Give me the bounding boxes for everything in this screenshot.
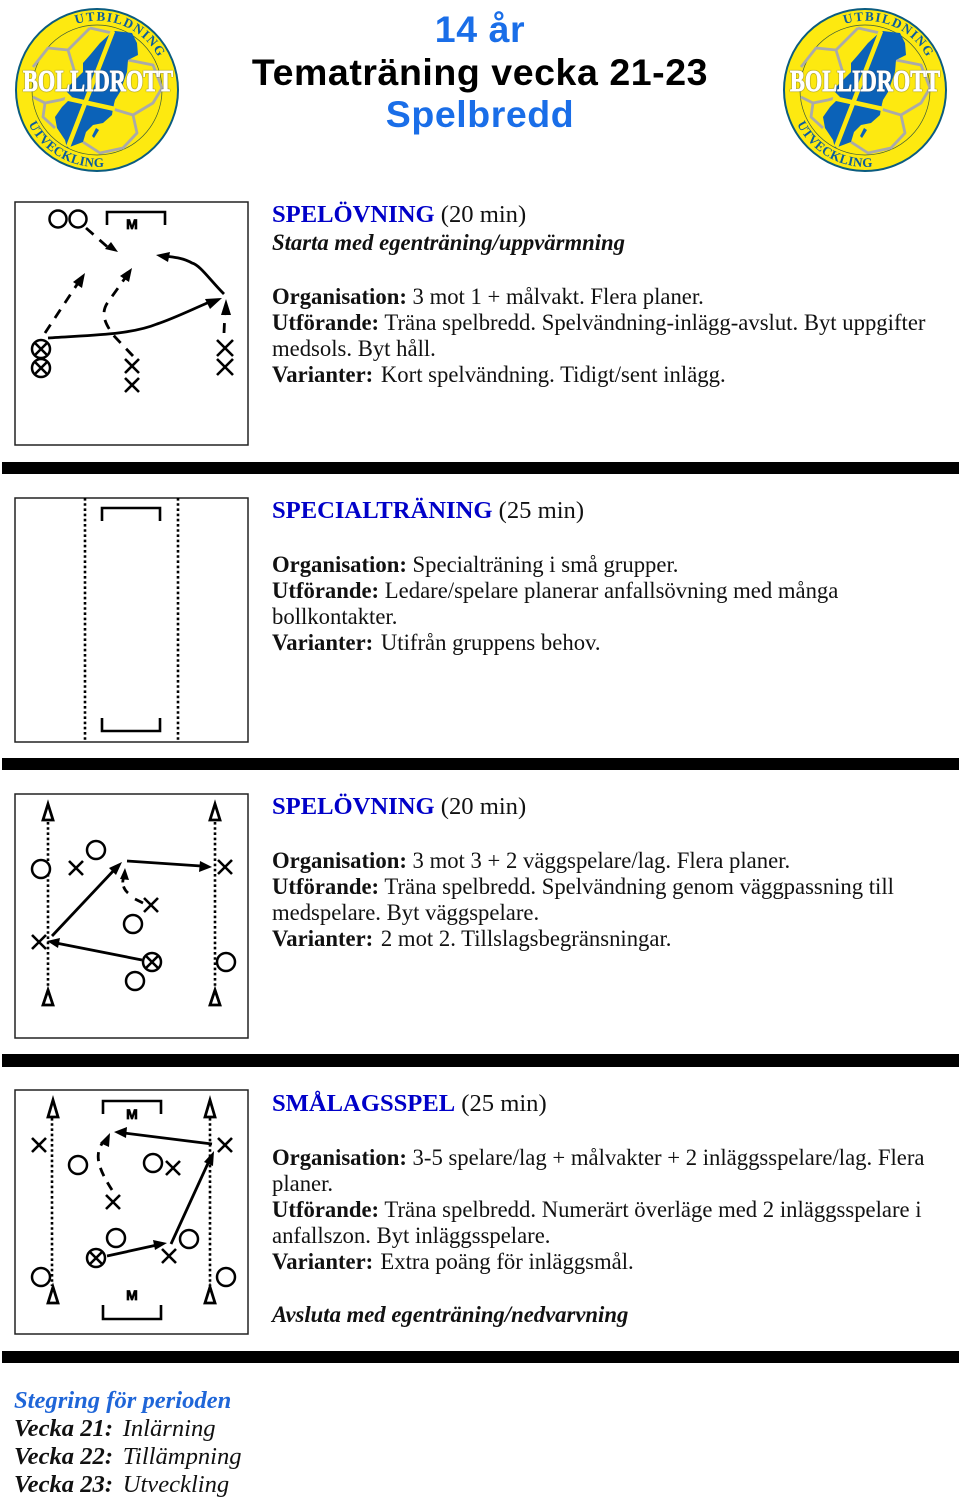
panel: diagram 4 smålagsspel: M bbox=[126, 1106, 138, 1122]
panel: diagram 4 smålagsspel bbox=[15, 1090, 248, 1334]
text block: smålagsspel: anfallszon. Byt inläggsspelare. bbox=[272, 1223, 550, 1248]
title bbox=[252, 8, 708, 135]
text block: spelövning 1: SPELÖVNING (20 min) bbox=[272, 201, 526, 228]
text block: spelövning 1: Starta med egenträning/uppvärmning bbox=[272, 230, 625, 255]
text block: stegring för perioden: Vecka 21: Inlärning bbox=[14, 1415, 216, 1442]
logo: left Bollidrott badge: UTBILDNING bbox=[74, 12, 164, 56]
text block: spelövning 1: Varianter: Kort spelvändning. Tidigt/sent inlägg. bbox=[272, 362, 726, 387]
panel: diagram 2 specialträning bbox=[15, 498, 248, 742]
text block: smålagsspel: planer. bbox=[272, 1171, 333, 1196]
panel: diagram 1 spelövning: M bbox=[126, 216, 138, 232]
text block: specialträning: Utförande: Ledare/spelare planerar anfallsövning med många bbox=[272, 578, 838, 603]
text block: spelövning 2: SPELÖVNING (20 min) bbox=[272, 793, 526, 820]
title: 14 år bbox=[435, 8, 525, 50]
text block: smålagsspel bbox=[270, 1089, 924, 1327]
text block: spelövning 1 bbox=[272, 201, 926, 387]
text block: spelövning 2: medspelare. Byt väggspelare. bbox=[272, 900, 539, 925]
text block: specialträning: bollkontakter. bbox=[272, 604, 397, 629]
text block: stegring för perioden: Stegring för perioden bbox=[14, 1387, 231, 1414]
logo: right Bollidrott badge bbox=[783, 8, 947, 172]
text block: specialträning bbox=[272, 497, 838, 655]
text block: stegring för perioden: Vecka 22: Tillämpning bbox=[14, 1443, 242, 1470]
text block: stegring för perioden: Vecka 23: Utveckling bbox=[14, 1471, 229, 1498]
logo: left Bollidrott badge: UTVECKLING bbox=[30, 120, 104, 167]
text block: spelövning 1: Organisation: 3 mot 1 + målvakt. Flera planer. bbox=[272, 284, 704, 309]
text block: smålagsspel: Utförande: Träna spelbredd. Numerärt överläge med 2 inläggsspelare i bbox=[272, 1197, 922, 1222]
panel: diagram 1 spelövning bbox=[15, 202, 248, 445]
text block: spelövning 1: medsols. Byt håll. bbox=[272, 336, 436, 361]
logo: left Bollidrott badge bbox=[15, 8, 179, 172]
text block: specialträning: SPECIALTRÄNING (25 min) bbox=[272, 497, 584, 524]
text block: smålagsspel: Avsluta med egenträning/nedvarvning bbox=[270, 1302, 628, 1327]
text block: smålagsspel: SMÅLAGSSPEL (25 min) bbox=[272, 1089, 547, 1117]
logo: right Bollidrott badge: UTBILDNING bbox=[842, 12, 933, 56]
text block: spelövning 2: Utförande: Träna spelbredd. Spelvändning genom väggpassning till bbox=[272, 874, 894, 899]
logo: right Bollidrott badge: UTVECKLING bbox=[798, 120, 872, 167]
text block: specialträning: Varianter: Utifrån gruppens behov. bbox=[272, 630, 601, 655]
panel: diagram 3 spelövning bbox=[15, 794, 248, 1038]
text block: spelövning 2: Organisation: 3 mot 3 + 2 väggspelare/lag. Flera planer. bbox=[272, 848, 790, 873]
logo: left Bollidrott badge: BOLLIDROTT bbox=[23, 63, 173, 98]
panel: diagram 4 smålagsspel: M bbox=[126, 1287, 138, 1303]
text block: stegring för perioden bbox=[14, 1387, 242, 1498]
title: Spelbredd bbox=[386, 93, 574, 135]
text block: smålagsspel: Organisation: 3-5 spelare/lag + målvakter + 2 inläggsspelare/lag. Flera bbox=[272, 1145, 924, 1170]
text block: spelövning 2: Varianter: 2 mot 2. Tillslagsbegränsningar. bbox=[272, 926, 671, 951]
text block: smålagsspel: Varianter: Extra poäng för inläggsmål. bbox=[272, 1249, 634, 1274]
text block: spelövning 1: Utförande: Träna spelbredd. Spelvändning-inlägg-avslut. Byt uppgifter bbox=[272, 310, 926, 335]
text block: specialträning: Organisation: Specialträning i små grupper. bbox=[272, 552, 678, 577]
text block: spelövning 2 bbox=[272, 793, 894, 951]
title: Tematräning vecka 21-23 bbox=[252, 51, 708, 93]
